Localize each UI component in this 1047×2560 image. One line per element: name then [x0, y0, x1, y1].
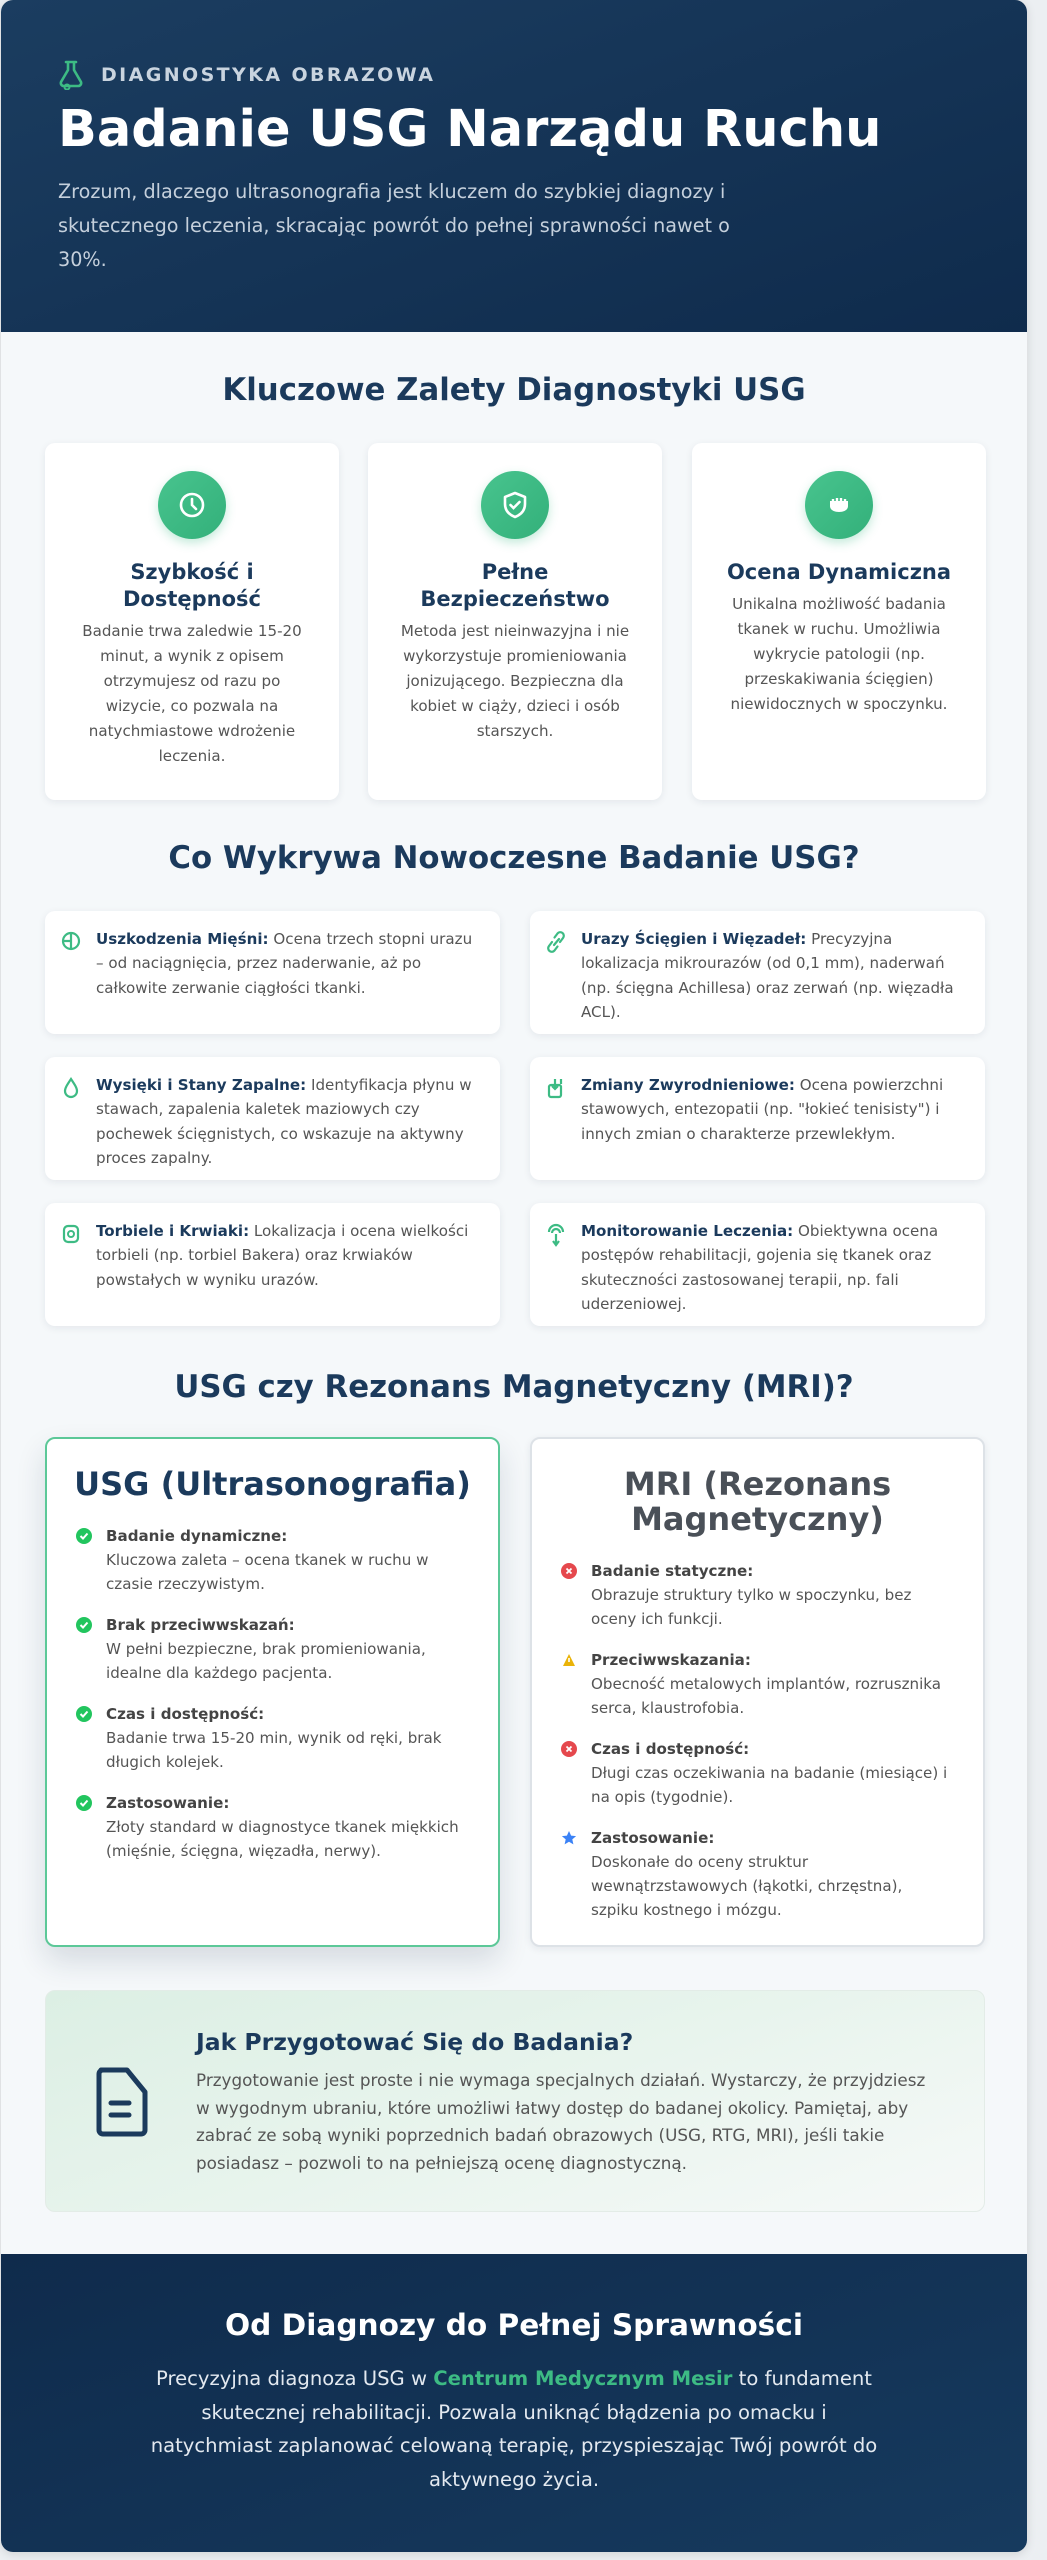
footer text — [151, 2367, 877, 2491]
heading: comparison: USG czy Rezonans Magnetyczny (MRI)? — [174, 1369, 854, 1405]
item: no contraindications — [76, 1616, 426, 1682]
panel: USG — [45, 1437, 500, 1947]
text: zabrać ze sobą wyniki poprzednich badań obrazowych (USG, RTG, MRI), jeśli takie — [196, 2125, 884, 2145]
item: dynamic — [76, 1527, 428, 1593]
item: contraindications: Obecność metalowych implantów, rozrusznika serca, klaustrofobia. — [591, 1675, 941, 1717]
icon: clock — [158, 471, 226, 539]
card: speed: Badanie trwa zaledwie 15-20 minut, a wynik z opisem otrzymujesz od razu po wizycie, co pozwala na natychmiastowe wdrożenie leczenia. — [82, 622, 302, 765]
item: degenerative — [530, 1057, 985, 1180]
subtitle — [58, 180, 730, 271]
text: Przygotowanie jest proste i nie wymaga specjalnych działań. Wystarczy, że przyjdziesz — [196, 2070, 925, 2090]
item: time: Czas i dostępność: — [106, 1705, 264, 1723]
item: cysts — [45, 1203, 500, 1326]
text: posiadasz – pozwoli to na pełniejszą ocenę diagnostyczną. — [196, 2153, 687, 2173]
item: time: Badanie trwa 15-20 min, wynik od ręki, brak długich kolejek. — [106, 1729, 442, 1771]
card: safety: Pełne Bezpieczeństwo — [420, 560, 610, 611]
heading: detection: Co Wykrywa Nowoczesne Badanie USG? — [168, 840, 860, 876]
item: no contraindications: W pełni bezpieczne, brak promieniowania, idealne dla każdego pacjenta. — [106, 1640, 426, 1682]
item: monitoring — [530, 1203, 985, 1326]
item: use: Doskonałe do oceny struktur — [591, 1853, 808, 1871]
card: dynamic — [692, 443, 986, 800]
icon: signal — [548, 1224, 564, 1247]
text — [196, 2070, 925, 2173]
item: dynamic: Badanie dynamiczne: — [106, 1527, 287, 1545]
item: time: Czas i dostępność: — [591, 1740, 749, 1758]
item: static: Obrazuje struktury tylko w spoczynku, bez oceny ich funkcji. — [591, 1586, 911, 1628]
item: effusions — [45, 1057, 500, 1180]
footer — [1, 2254, 1027, 2552]
item: time: Długi czas oczekiwania na badanie (miesiące) i na opis (tygodnie). — [591, 1764, 947, 1806]
item: degenerative: Zmiany Zwyrodnieniowe: Ocena powierzchni stawowych, entezopatii (np. "łokieć tenisisty") i innych zmian o charakterze przewlekłym. — [581, 1076, 943, 1143]
icon: flask — [60, 60, 82, 90]
item: monitoring: Monitorowanie Leczenia: Obiektywna ocena postępów rehabilitacji, gojenia się tkanek oraz skuteczności zastosowanej terapii, np. fali uderzeniowej. — [581, 1222, 938, 1313]
footer text: Precyzyjna diagnoza USG w Centrum Medycznym Mesir to fundament — [156, 2367, 872, 2390]
item: tendons — [530, 911, 985, 1034]
item: use — [562, 1829, 902, 1919]
card: speed: Szybkość i Dostępność — [123, 560, 261, 611]
icon: muscle — [62, 932, 80, 950]
item: static — [561, 1562, 911, 1628]
eyebrow — [60, 60, 435, 90]
item: effusions: Wysięki i Stany Zapalne: Identyfikacja płynu w stawach, zapalenia kaletek maziowych czy pochewek ścięgnistych, co wskazuje na aktywny proces zapalny. — [96, 1076, 472, 1167]
panel: MRI: MRI (Rezonans Magnetyczny) — [624, 1465, 891, 1538]
text: w wygodnym ubraniu, które umożliwi łatwy dostęp do badanej okolicy. Pamiętaj, aby — [196, 2098, 908, 2118]
icon: joint — [548, 1079, 562, 1098]
item: tendons: Urazy Ścięgien i Więzadeł: Precyzyjna lokalizacja mikrourazów (od 0,1 mm), naderwań (np. ścięgna Achillesa) oraz zerwań (np. więzadła ACL). — [581, 930, 954, 1021]
subtitle: skutecznego leczenia, skracając powrót do pełnej sprawności nawet o — [58, 214, 730, 237]
subtitle: Zrozum, dlaczego ultrasonografia jest kluczem do szybkiej diagnozy i — [58, 180, 725, 203]
footer heading: Od Diagnozy do Pełnej Sprawności — [225, 2308, 803, 2342]
heading: Jak Przygotować Się do Badania? — [196, 2028, 633, 2056]
card: dynamic: Unikalna możliwość badania tkanek w ruchu. Umożliwia wykrycie patologii (np. przeskakiwania ścięgien) niewidocznych w spoczynku. — [731, 595, 947, 713]
footer text: natychmiast zaplanować celowaną terapię, przyspieszając Twój powrót do — [151, 2434, 877, 2457]
eyebrow: DIAGNOSTYKA OBRAZOWA — [101, 64, 435, 86]
icon: drop — [64, 1077, 78, 1098]
item: time — [76, 1705, 442, 1771]
card: speed — [45, 443, 339, 800]
footer text: skutecznej rehabilitacji. Pozwala uniknąć błądzenia po omacku i — [201, 2401, 827, 2424]
title: Badanie USG Narządu Ruchu — [58, 100, 881, 159]
item: use: Złoty standard w diagnostyce tkanek miękkich (mięśnie, ścięgna, więzadła, nerwy). — [106, 1818, 459, 1860]
item: muscles: Uszkodzenia Mięśni: Ocena trzech stopni urazu – od naciągnięcia, przez naderwanie, aż po całkowite zerwanie ciągłości tkanki. — [96, 930, 472, 997]
panel: preparation — [45, 1990, 985, 2212]
item: time — [561, 1740, 947, 1806]
item: muscles — [45, 911, 500, 1034]
item: use: wewnątrzstawowych (łąkotki, chrzęstna), — [591, 1877, 902, 1895]
card: safety: Metoda jest nieinwazyjna i nie wykorzystuje promieniowania jonizującego. Bezpieczna dla kobiet w ciąży, dzieci i osób starszych. — [401, 622, 629, 740]
header — [1, 0, 1027, 332]
card: dynamic: Ocena Dynamiczna — [727, 560, 951, 584]
item: use — [76, 1794, 459, 1860]
footer text: aktywnego życia. — [429, 2468, 599, 2491]
item: contraindications — [563, 1651, 941, 1717]
icon: motion — [805, 471, 873, 539]
icon: shield — [481, 471, 549, 539]
item: dynamic: Kluczowa zaleta – ocena tkanek w ruchu w czasie rzeczywistym. — [106, 1551, 428, 1593]
item: use: szpiku kostnego i mózgu. — [591, 1901, 782, 1919]
heading: advantages: Kluczowe Zalety Diagnostyki USG — [222, 372, 806, 408]
item: contraindications: Przeciwwskazania: — [591, 1651, 751, 1669]
panel: USG: USG (Ultrasonografia) — [74, 1465, 471, 1503]
subtitle: 30%. — [58, 248, 107, 271]
item: cysts: Torbiele i Krwiaki: Lokalizacja i ocena wielkości torbieli (np. torbiel Bakera) oraz krwiaków powstałych w wyniku urazów. — [96, 1222, 468, 1289]
item: static: Badanie statyczne: — [591, 1562, 753, 1580]
item: use: Zastosowanie: — [106, 1794, 229, 1812]
item: no contraindications: Brak przeciwwskazań: — [106, 1616, 295, 1634]
icon: document — [96, 2068, 148, 2136]
panel: MRI — [530, 1437, 985, 1947]
item: use: Zastosowanie: — [591, 1829, 714, 1847]
card: safety — [368, 443, 662, 800]
icon: cyst — [62, 1224, 80, 1244]
icon: link — [547, 931, 565, 953]
